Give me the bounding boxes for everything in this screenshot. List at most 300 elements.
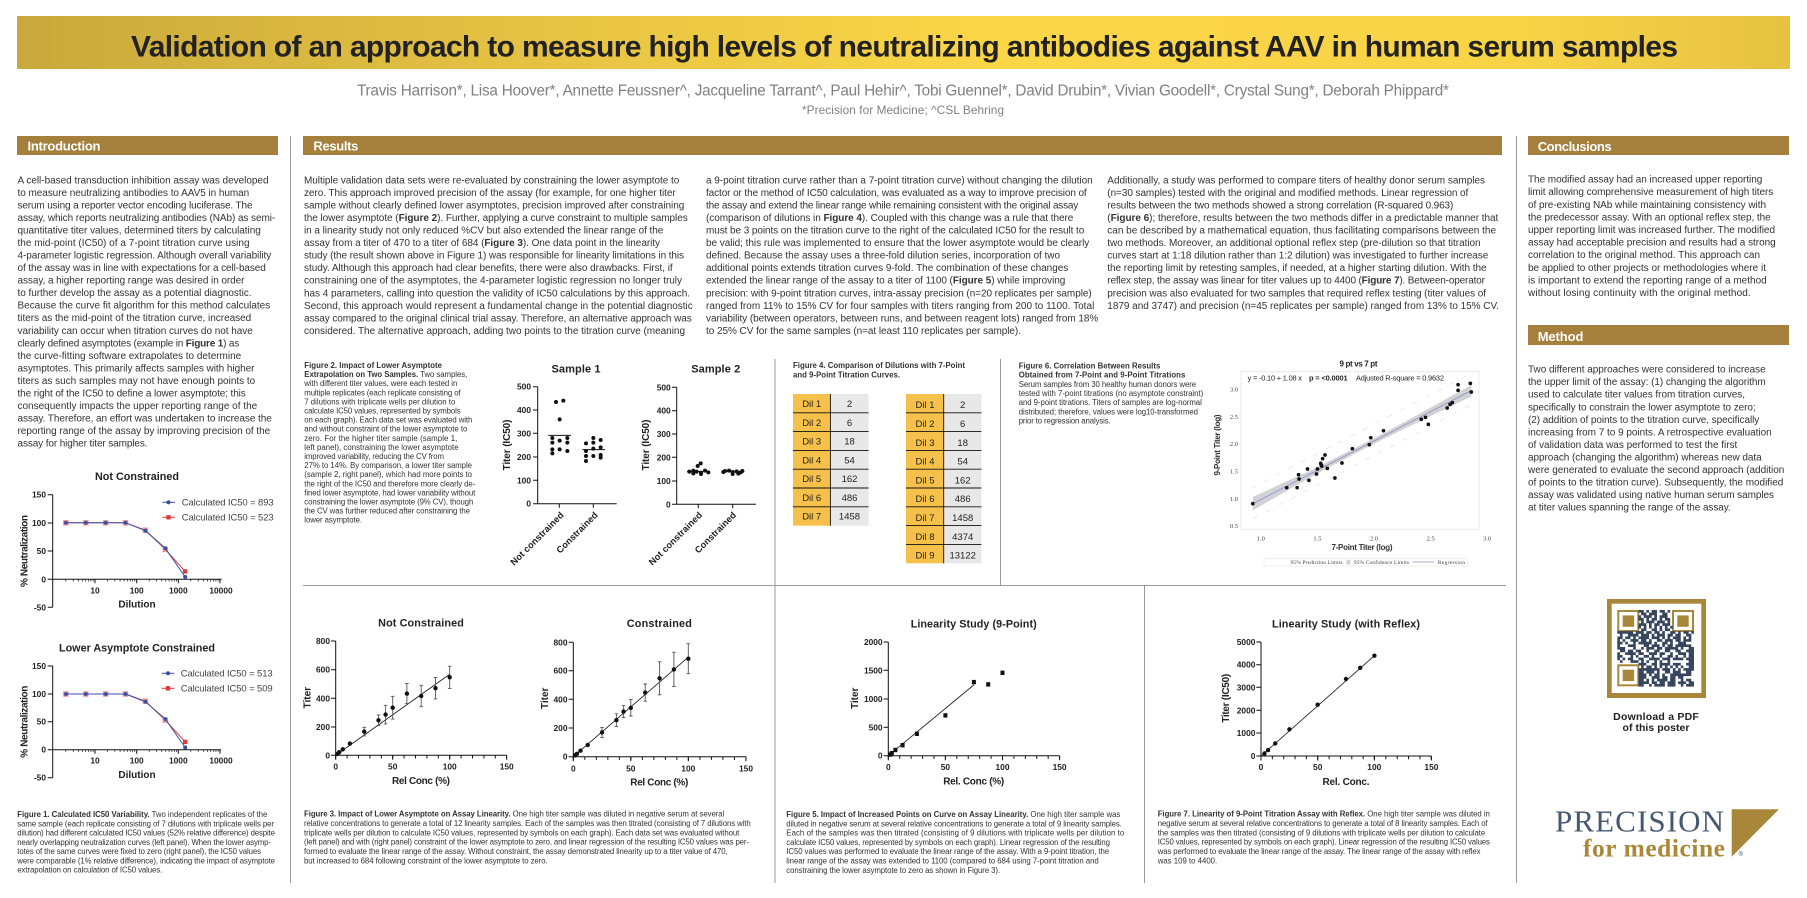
text: download a PDF (1613, 711, 1699, 734)
chart: figure 1 not constrained: 100 (32, 518, 46, 528)
chart: figure 7 linearity with reflex: 0 (1259, 762, 1264, 772)
panel: method (1527, 325, 1789, 514)
chart: figure 7 linearity with reflex: 1000 (1237, 728, 1256, 738)
table: 9-point dilutions: 13122 (949, 551, 976, 562)
legend: figure 6 (1264, 558, 1468, 566)
text block: introduction: assay for higher titer samples. (18, 439, 148, 450)
table: 9-point dilutions: 1458 (952, 513, 973, 524)
title: Validation of an approach to measure high levels of neutralizing antibodies against AAV in human serum samples (131, 31, 1678, 64)
text block: conclusions: correlation to the original method. This approach can (1528, 250, 1760, 261)
caption: figure 2: zero. For the higher titer sample (sample 1, (304, 434, 457, 443)
text block: results column 2: extended the linear range of the assay to a titer of 1100 (Figure 5) while improving (706, 276, 1065, 287)
text block: method: of validation data was performed to test the first (1528, 440, 1738, 451)
icon: QR code (1607, 599, 1706, 698)
chart: figure 1 not constrained: Dilution (118, 600, 156, 610)
caption: figure 3: relative concentrations to generate a total of 12 linearity samples. Each of the samples was then titrated (consisting of 7 dilutions with (304, 819, 751, 828)
caption: figure 3: (left panel) and with (right panel) constraint of the lower asymptote to zero, and linear regression of the resulting IC50 values was per- (304, 838, 749, 847)
text block: introduction: to further develop the assay as a potential diagnostic. (18, 288, 252, 299)
text block: results column 2: (comparison of dilutions in Figure 4). Coupled with this change was a rule that there (706, 213, 1074, 224)
caption: figure 5: constraining the lower asymptote to zero as shown in Figure 3). (786, 866, 1000, 875)
table: 7-point dilutions: Dil 6 (802, 493, 821, 504)
table: 9-point dilutions: Dil 8 (915, 532, 935, 543)
chart: figure 6 correlation scatter: 3.0 (1230, 386, 1238, 394)
chart: figure 2 sample 2: 400 (657, 406, 671, 416)
chart: figure 6 correlation scatter: 9 pt vs 7 pt (1340, 360, 1378, 369)
caption: figure 2: 27% to 14%. By comparison, a lower titer sample (304, 461, 472, 470)
text block: results column 3 (1107, 175, 1499, 312)
table: 7-point dilutions (793, 394, 869, 526)
chart: figure 7 linearity with reflex: Linearity Study (with Reflex) (1272, 618, 1420, 630)
caption: figure 2: on each graph). Each data set was evaluated with (304, 416, 472, 425)
caption: figure 6: Serum samples from 30 healthy human donors were (1019, 380, 1196, 389)
text block: introduction: assay. Therefore, an effort was undertaken to increase the (18, 414, 272, 425)
caption: figure 1: were comparable (1% relative difference), indicating the impact of asymptote (16, 856, 275, 865)
text block: results column 3: two methods. Moreover, an additional optional reflex step (pre-dilution so that titration (1107, 238, 1481, 249)
caption: figure 2: lower asymptote. (304, 516, 362, 525)
chart: figure 6 correlation scatter: 3.0 (1483, 536, 1491, 542)
caption: figure 7: IC50 values, represented by symbols on each graph). Linear regression of the resulting IC50 values (1158, 838, 1490, 847)
text block: results column 1: the lower asymptote (Figure 2). Further, applying a curve constraint to multiple samples (304, 213, 688, 224)
chart: figure 5 linearity 9-point: Titer (850, 687, 861, 709)
caption: figure 2: constraining the lower asymptote (9% CV), though (304, 498, 473, 506)
text block: results column 3: Additionally, a study was performed to compare titers of healthy donor serum samples (1107, 175, 1485, 186)
chart: figure 3 constrained: Constrained (627, 618, 692, 630)
caption: figure 4: and 9-Point Titration Curves. (793, 370, 900, 379)
caption: figure 6: distributed; therefore, values were log10-transformed (1019, 407, 1198, 416)
chart: figure 6 correlation scatter: 1.5 (1230, 468, 1238, 476)
caption: figure 2: Extrapolation on Two Samples. Two samples, (304, 370, 467, 379)
chart: figure 1 lower asymptote constrained: 150 (32, 661, 46, 671)
caption: figure 1: Figure 1. Calculated IC50 Variability. Two independent replicates of the (17, 810, 267, 819)
chart: figure 6 correlation scatter: 2.0 (1370, 536, 1378, 542)
text block: introduction: variability can occur when titration curves do not have (18, 326, 253, 337)
legend: figure 1 constrained: Calculated IC50 = 509 (181, 684, 273, 695)
caption: figure 2: with different titer values, were each tested in (303, 379, 457, 388)
chart: figure 3 not constrained (302, 618, 514, 787)
text block: method: the upper limit of the assay: (1) changing the algorithm (1528, 377, 1766, 388)
caption: figure 6: and 9-point titrations. Titers of samples are log-normal (1019, 398, 1202, 407)
chart: figure 2 sample 2: Not constrained (647, 510, 704, 567)
text block: conclusions: limit allowing comprehensive measurement of high titers (1528, 187, 1773, 198)
text block: introduction: the right of the IC50 to define a lower asymptote; this (18, 388, 246, 400)
text block: results column 3: results between the two methods showed a strong correlation (R-squared 0.963) (1107, 200, 1453, 211)
text block: conclusions: without losing continuity with the original method. (1527, 288, 1751, 299)
affiliations: *Precision for Medicine; ^CSL Behring (802, 103, 1004, 117)
text block: introduction: titers as such samples may not have enough points to (18, 376, 256, 387)
authors: Travis Harrison*, Lisa Hoover*, Annette Feussner^, Jacqueline Tarrant^, Paul Hehir^, Tobi Guennel*, David Drubin*, Vivian Goodell*, Crystal Sung*, Deborah Phippard* (357, 82, 1449, 100)
table: 9-point dilutions: Dil 9 (915, 551, 935, 562)
heading: results: Results (313, 138, 358, 154)
text block: method: were generated to evaluate the second approach (addition (1527, 465, 1784, 476)
chart: figure 7 linearity with reflex: 3000 (1237, 682, 1256, 692)
text block: conclusions: assay had acceptable precision and results had a strong (1528, 238, 1776, 249)
chart: figure 3 not constrained: 800 (316, 636, 330, 646)
chart: figure 5 linearity 9-point: Linearity Study (9-Point) (911, 618, 1037, 630)
table: 7-point dilutions: 486 (842, 493, 857, 504)
table: 7-point dilutions: 1458 (839, 512, 860, 523)
text block: results column 2: defined. Because the assay uses a three-fold dilution series, incorporation of two (706, 251, 1060, 262)
text block: results column 3: (n=30 samples) tested with the original and modified methods. Linear regression of (1107, 188, 1469, 199)
chart: figure 5 linearity 9-point: 1500 (864, 665, 883, 675)
chart: figure 1 not constrained: -50 (34, 602, 46, 612)
text block: method: (2) addition of points to the titration curve, specifically (1528, 415, 1759, 426)
table: 9-point dilutions: Dil 7 (915, 513, 935, 524)
chart: figure 3 not constrained: Not Constrained (378, 618, 464, 630)
text block: results column 2: to 25% CV for the same samples (n=at least 110 replicates per sample). (706, 326, 1021, 337)
caption: figure 5: IC50 values was performed to evaluate the linear range of the assay. With a 9-point titration, the (786, 847, 1109, 856)
chart: figure 1 not constrained: 1000 (169, 586, 188, 596)
caption: figure 2: the right of the IC50 and therefore more clearly de- (304, 479, 476, 488)
chart: figure 2 sample 1: 200 (517, 452, 531, 462)
caption: figure 1: same sample (each replicate consisting of 7 dilutions with triplicate wells per (17, 819, 274, 828)
caption: figure 3: Figure 3. Impact of Lower Asymptote on Assay Linearity. One high titer sample was diluted in negative serum at several (304, 810, 725, 819)
chart: figure 2 sample 1: 400 (517, 405, 531, 415)
chart: figure 3 constrained: 0 (571, 763, 576, 773)
chart: figure 7 linearity with reflex (1221, 618, 1439, 788)
chart: figure 6 correlation scatter: y = -0.10 + 1.08 x (1248, 374, 1302, 382)
caption: figure 3: but increased to 684 following constraint of the lower asymptote to zero. (304, 856, 548, 865)
chart: figure 2 sample 1: 300 (517, 428, 531, 438)
chart: figure 2 sample 1: Sample 1 (552, 363, 600, 375)
text block: conclusions: The modified assay had an increased upper reporting (1528, 175, 1762, 186)
chart: figure 5 linearity 9-point: 0 (886, 762, 891, 772)
chart: figure 1 not constrained: 150 (32, 490, 46, 500)
chart: figure 3 not constrained: 100 (443, 762, 457, 772)
text block: method: Two different approaches were considered to increase (1528, 365, 1766, 376)
chart: figure 7 linearity with reflex: Rel. Conc. (1322, 777, 1370, 788)
text block: results column 2: precision: with 9-point titration curves, intra-assay precision (n=20 replicates per sample) (706, 288, 1092, 299)
text block: introduction (18, 175, 275, 450)
text block: results column 1: Multiple validation data sets were re-evaluated by constraining the lower asymptote to (304, 175, 680, 186)
text block: results column 2: variability (between operators, between runs, and between reagent lots) ranged from 18% (706, 313, 1098, 324)
caption: figure 3 (304, 810, 751, 865)
chart: figure 2 sample 2: 0 (666, 499, 671, 509)
chart: figure 3 constrained: Rel Conc (%) (630, 778, 688, 788)
text block: results column 1: zero. This approach improved precision of the assay (for example, for one higher titer (304, 188, 676, 199)
caption: figure 2: the CV was further reduced after constraining the (304, 507, 470, 516)
chart: figure 3 not constrained: 400 (316, 693, 330, 703)
table: 7-point dilutions: 6 (847, 418, 852, 429)
caption: figure 7: negative serum at several relative concentrations to generate a total of 8 linearity samples. Each of (1158, 819, 1488, 828)
text block: introduction: quantitative titer values, determined titers by calculating (18, 226, 261, 236)
chart: figure 3 not constrained: 0 (333, 762, 338, 772)
table: 9-point dilutions: Dil 5 (915, 475, 935, 486)
panel: conclusions (1527, 136, 1789, 299)
caption: figure 6 (1019, 361, 1204, 426)
chart: figure 2 sample 1: Titer (IC50) (502, 420, 513, 470)
text block: method: of points to the titration curve). Subsequently, the modified (1528, 478, 1783, 489)
panel: results (302, 136, 1502, 875)
caption: figure 2: Figure 2. Impact of Lower Asymptote (304, 361, 443, 370)
chart: figure 1 lower asymptote constrained: -50 (34, 773, 46, 783)
chart: figure 1 lower asymptote constrained: 1000 (169, 756, 188, 766)
chart: figure 3 constrained: 100 (681, 763, 696, 773)
chart: figure 2 sample 1: Constrained (554, 510, 600, 555)
chart: figure 7 linearity with reflex: 150 (1424, 762, 1439, 772)
chart: figure 5 linearity 9-point: 1000 (864, 694, 883, 704)
caption: figure 5: Figure 5. Impact of Increased Points on Curve on Assay Linearity. One high titer sample was (786, 810, 1120, 819)
chart: figure 3 not constrained: 150 (500, 762, 514, 772)
chart: figure 3 not constrained: Titer (302, 687, 314, 708)
table: 9-point dilutions: 54 (957, 457, 968, 468)
chart: figure 6 correlation scatter: 1.0 (1257, 536, 1265, 542)
logo: Precision for Medicine: PRECISION (1555, 804, 1724, 839)
caption: figure 2: multiple replicates (each replicate consisting of (304, 388, 461, 397)
chart: figure 3 constrained (540, 618, 753, 788)
text block: introduction: assay, a higher reporting range was desired in order (18, 276, 245, 287)
table: 7-point dilutions: Dil 7 (802, 512, 821, 523)
chart: figure 2 sample 2: 300 (657, 429, 671, 439)
chart: figure 2 sample 2: 100 (657, 476, 671, 486)
caption: figure 5: linear range of the assay was extended to 1100 (compared to 684 using 7-point titration and (786, 856, 1099, 866)
chart: figure 2 sample 1: 500 (517, 382, 531, 392)
text block: conclusions (1527, 175, 1776, 299)
heading: introduction (17, 136, 278, 155)
text block: introduction: titers as the mid-point of the titration curve, increased (18, 313, 251, 324)
text block: conclusions: the predecessor assay. With an optional reflex step, the (1528, 212, 1771, 223)
text block: introduction: the mid-point (IC50) of a 7-point titration curve using (18, 238, 250, 249)
text block: results column 1: constraining one of the asymptotes, the 4-parameter logistic regression no longer truly (304, 276, 682, 287)
caption: figure 1: dilution) had different calculated IC50 values (52% relative difference) despite (17, 829, 275, 838)
table: 7-point dilutions: Dil 1 (802, 399, 821, 410)
chart: figure 1 not constrained (20, 471, 274, 612)
chart: figure 6 correlation scatter: 2.5 (1427, 536, 1435, 542)
chart: figure 6 correlation scatter: Adjusted R-square = 0.9632 (1356, 374, 1444, 382)
caption: figure 5 (786, 810, 1125, 875)
logo: Precision for Medicine: ® (1738, 851, 1744, 858)
text block: results column 1: study. Although this approach had clear benefits, there were also drawbacks. First, if (304, 263, 673, 274)
chart: figure 3 constrained: 0 (563, 752, 568, 762)
chart: figure 7 linearity with reflex: Titer (IC50) (1221, 674, 1232, 723)
chart: figure 1 not constrained: 0 (41, 574, 46, 584)
chart: figure 6 correlation scatter: 1.5 (1313, 536, 1321, 542)
chart: figure 3 constrained: 200 (554, 723, 568, 733)
text block: results column 1: sample without clearly defined lower asymptotes, precision improved after constraining (304, 200, 684, 211)
chart: figure 7 linearity with reflex: 2000 (1237, 705, 1256, 715)
text block: results column 1: study (the result shown above in Figure 1) was responsible for linearity limitations in this (304, 251, 684, 262)
text block: method: at titer values spanning the range of the assay. (1528, 503, 1731, 514)
chart: figure 5 linearity 9-point: 0 (878, 751, 883, 761)
caption: figure 4: Figure 4. Comparison of Dilutions with 7-Point (793, 361, 965, 370)
chart: figure 3 not constrained: 50 (388, 762, 398, 772)
table: 9-point dilutions: Dil 6 (915, 494, 935, 505)
chart: figure 2 sample 1 (502, 363, 617, 567)
table: 9-point dilutions: 18 (957, 438, 968, 449)
text block: introduction: clearly defined asymptotes (example in Figure 1) as (18, 338, 239, 349)
text block: results column 2 (706, 175, 1098, 337)
chart: figure 1 lower asymptote constrained (20, 643, 273, 783)
caption: figure 6: tested with 7-point titrations (no asymptote constraint) (1019, 389, 1204, 398)
legend: figure 6: 95% Prediction Limits (1290, 560, 1342, 566)
panel: introduction (16, 136, 278, 875)
chart: figure 6 correlation scatter: 0.5 (1230, 523, 1238, 530)
legend: figure 6: 95% Confidence Limits (1354, 559, 1409, 566)
table: 9-point dilutions: 4374 (952, 532, 973, 543)
chart: figure 5 linearity 9-point: 150 (1053, 762, 1067, 772)
caption: figure 5: Each of the samples was then titrated (consisting of 9 dilutions with triplicate wells per dilution to (786, 829, 1125, 838)
caption: figure 7: Figure 7. Linearity of 9-Point Titration Assay with Reflex. One high titer sample was diluted in (1158, 810, 1490, 819)
caption: figure 2: 7 dilutions with triplicate wells per dilution to (304, 397, 456, 406)
legend: figure 6: Regression (1438, 560, 1465, 566)
legend: figure 1 not constrained: Calculated IC50 = 893 (182, 498, 274, 509)
caption: figure 2: left panel), constraining the lower asymptote (304, 443, 459, 452)
chart: figure 1 not constrained: Not Constrained (95, 471, 179, 483)
chart: figure 2 sample 2: Sample 2 (691, 363, 740, 375)
text block: results column 2: factor or the method of IC50 calculation, was evaluated as a way to improve precision of (706, 188, 1087, 199)
logo: Precision for Medicine (1555, 804, 1779, 863)
caption: figure 6: Figure 6. Correlation Between Results (1019, 361, 1161, 370)
chart: figure 7 linearity with reflex: 4000 (1237, 660, 1256, 670)
title banner (17, 16, 1790, 69)
legend: figure 1 not constrained (162, 498, 274, 524)
chart: figure 3 constrained: 150 (739, 763, 753, 773)
text block: results column 3: can be described by a mathematical equation, thus facilitating comparisons between the (1107, 226, 1496, 236)
chart: figure 6 correlation scatter: 7-Point Titer (log) (1332, 543, 1393, 552)
text block: conclusions: be applied to other projects or methodologies where it (1528, 263, 1766, 274)
chart: figure 1 lower asymptote constrained: 10 (90, 756, 100, 766)
text block: method (1527, 365, 1784, 514)
table: 7-point dilutions: Dil 4 (802, 456, 821, 466)
caption: figure 1: nearly overlapping neutralization curves (left panel). When the lower asymp- (17, 838, 271, 847)
caption: figure 3: formed to evaluate the linear range of the assay. Without constraint, the assay demonstrated linearity up to a titer value of 470, (304, 847, 728, 856)
text block: results column 1: assay from a titer of 470 to a titer of 684 (Figure 3). One data point in the linearity (304, 238, 660, 249)
text block: method: assay was validated using native human serum samples (1528, 490, 1774, 501)
legend: figure 1 constrained: Calculated IC50 = 513 (181, 669, 273, 680)
table: 9-point dilutions: Dil 3 (915, 438, 935, 449)
text block: results column 2: be valid; this rule was implemented to ensure that the lower asymptote would be clearly (706, 238, 1089, 249)
chart: figure 6 correlation scatter: 9-Point Titer (log) (1213, 414, 1222, 476)
text block: introduction: asymptotes. This primarily affects samples with higher (18, 363, 255, 374)
chart: figure 1 lower asymptote constrained: Lower Asymptote Constrained (59, 643, 215, 655)
chart: figure 3 constrained: Titer (540, 687, 551, 709)
table: 9-point dilutions: 6 (960, 419, 965, 430)
chart: figure 3 constrained: 600 (554, 666, 568, 676)
chart: figure 2 sample 2: 500 (657, 382, 671, 392)
text block: method: increasing from 7 to 9 points. A retrospective evaluation (1528, 427, 1772, 438)
text block: introduction: assay, which reports neutralizing antibodies (NAb) as semi- (18, 213, 275, 224)
caption: figure 2: and without constraint of the lower asymptote to (304, 425, 468, 434)
text block: results column 3: 1879 and 3747) and precision (n=45 replicates per sample) ranged from 13% to 15% CV. (1107, 301, 1499, 312)
caption: figure 2: (sample 2, right panel), which had more points to (304, 470, 473, 479)
chart: figure 6 correlation scatter: p = <0.0001 (1309, 374, 1348, 382)
text block: introduction: of the assay was in line with expectations for a cell-based (18, 263, 266, 274)
legend: figure 1 not constrained: Calculated IC50 = 523 (182, 513, 274, 524)
chart: figure 6 correlation scatter: 2.5 (1230, 414, 1238, 421)
table: 7-point dilutions: Dil 2 (802, 418, 821, 429)
table: 9-point dilutions (906, 394, 981, 563)
text block: method: used to calculate titer values from titration curves, (1528, 390, 1745, 401)
chart: figure 1 lower asymptote constrained: 0 (41, 745, 46, 755)
chart: figure 3 not constrained: 200 (316, 722, 330, 732)
caption: figure 5: diluted in negative serum at several relative concentrations to generate a total of 9 linearity samples. (786, 819, 1122, 828)
text block: results column 2: a 9-point titration curve rather than a 7-point titration curve) without changing the dilution (706, 175, 1093, 186)
chart: figure 1 not constrained: 10 (90, 586, 100, 596)
text block: introduction: serum using a reporter vector encoding luciferase. The (18, 200, 253, 211)
chart: figure 2 sample 1: 100 (517, 475, 531, 485)
text block: results column 2: additional points extends titration curves 9-fold. The combination of these changes (706, 263, 1068, 274)
text block: conclusions: of pre-existing NAb while maintaining consistency with (1528, 200, 1766, 211)
caption: figure 1 (16, 810, 275, 875)
text block: results column 2: ranged from 11% to 15% CV for four samples with titers ranging from 200 to 1100. Total (706, 301, 1094, 312)
text block: introduction: to measure neutralizing antibodies to AAV5 in human (18, 188, 249, 199)
text block: results column 1: Second, this approach would represent a fundamental change in the potential diagnostic (304, 301, 693, 312)
heading: results (303, 136, 1502, 155)
table: 9-point dilutions: 486 (955, 494, 971, 505)
chart: figure 7 linearity with reflex: 100 (1367, 762, 1382, 772)
text block: results column 2: the assay and extend the linear range while remaining consistent with the original assay (706, 200, 1078, 211)
text block: introduction: consequently impacts the upper reporting range of the (18, 401, 258, 412)
text block: introduction: A cell-based transduction inhibition assay was developed (18, 175, 268, 186)
text block: results column 1: has 4 parameters, calling into question the validity of IC50 calculations by this approach. (304, 288, 690, 299)
heading: method: Method (1538, 329, 1583, 344)
legend: figure 1 constrained (162, 669, 273, 695)
chart: figure 3 not constrained: 600 (316, 665, 330, 675)
caption: figure 2: fined lower asymptote, had lower variability without (304, 488, 476, 497)
text block: results column 2: must be 3 points on the titration curve to the right of the calculated IC50 for the result to (706, 226, 1085, 236)
heading: conclusions: Conclusions (1538, 139, 1612, 154)
text block: introduction: reporting range of the assay by improving precision of the (18, 426, 271, 437)
table: 7-point dilutions: 2 (847, 399, 852, 410)
chart: figure 5 linearity 9-point: Rel. Conc (%) (943, 776, 1004, 788)
chart: figure 3 constrained: 400 (554, 694, 568, 704)
chart: figure 2 sample 2: 200 (657, 452, 671, 462)
text block: results column 3: reflex step, the assay was linear for titer values up to 4400 (Figure 7). Between-operator (1107, 276, 1486, 287)
caption: figure 7: was performed to evaluate the linear range of the assay. The linear range of the assay with reflex (1157, 847, 1481, 856)
chart: figure 7 linearity with reflex: 5000 (1237, 637, 1256, 647)
chart: figure 5 linearity 9-point: 100 (996, 762, 1010, 772)
chart: figure 1 not constrained: 50 (37, 546, 46, 556)
table: 9-point dilutions: 162 (955, 475, 971, 486)
chart: figure 3 not constrained: Rel Conc (%) (392, 776, 450, 787)
caption: figure 2: calculate IC50 values, represented by symbols (304, 406, 461, 416)
chart: figure 3 constrained: 50 (626, 763, 636, 773)
table: 9-point dilutions: Dil 2 (915, 419, 935, 430)
text: download a PDF: of this poster (1622, 722, 1690, 734)
chart: figure 1 not constrained: 10000 (209, 586, 233, 596)
chart: figure 1 lower asymptote constrained: Dilution (118, 770, 156, 781)
chart: figure 1 lower asymptote constrained: 100 (130, 756, 144, 766)
caption: figure 2 (303, 361, 476, 525)
chart: figure 2 sample 1: 0 (526, 499, 531, 509)
text block: results column 3: precision was also evaluated for two samples that required reflex testing (titer values of (1107, 288, 1486, 299)
chart: figure 6 correlation scatter: 2.0 (1230, 441, 1238, 448)
chart: figure 6 correlation scatter (1213, 360, 1491, 566)
chart: figure 1 lower asymptote constrained: 10000 (209, 756, 233, 766)
table: 7-point dilutions: Dil 3 (802, 437, 821, 448)
caption: figure 2: improved variability, reducing the CV from (304, 452, 444, 461)
text block: method: approach (changing the algorithm) whereas new data (1528, 452, 1762, 464)
chart: figure 1 not constrained: 100 (130, 586, 144, 596)
chart: figure 7 linearity with reflex: 50 (1313, 762, 1323, 772)
table: 9-point dilutions: Dil 4 (915, 457, 935, 468)
text block: results column 1: assay compared to the original clinical trial assay. Therefore, an alternative approach was (304, 313, 692, 324)
text block: introduction: 4-parameter logistic regression. Although overall variability (18, 250, 271, 262)
text block: results column 1: considered. The alternative approach, adding two points to the titration curve (meaning (304, 326, 685, 337)
caption: figure 4 (793, 361, 965, 379)
caption: figure 6: Obtained from 7-Point and 9-Point Titrations (1019, 371, 1186, 380)
chart: figure 7 linearity with reflex: 0 (1251, 751, 1256, 761)
chart: figure 3 constrained: 800 (554, 637, 568, 647)
chart: figure 5 linearity 9-point: 50 (941, 762, 950, 772)
text block: results column 1: in a linearity study not only reduced %CV but also extended the linear range of the (304, 226, 664, 236)
heading: conclusions (1528, 136, 1789, 155)
text block: results column 3: (Figure 6); therefore, results between the two methods differ in a predictable manner that (1107, 213, 1499, 224)
text block: results column 3: the reporting limit by retesting samples, if needed, at a higher starting dilution. With the (1107, 263, 1487, 274)
caption: figure 7: the samples was then titrated (consisting of 9 dilutions with triplicate wells per dilution to calculate (1158, 828, 1485, 837)
caption: figure 7: was 109 to 4400. (1157, 856, 1217, 865)
text block: introduction: Because the curve fit algorithm for this method calculates (18, 301, 270, 312)
heading: introduction: Introduction (28, 138, 101, 154)
